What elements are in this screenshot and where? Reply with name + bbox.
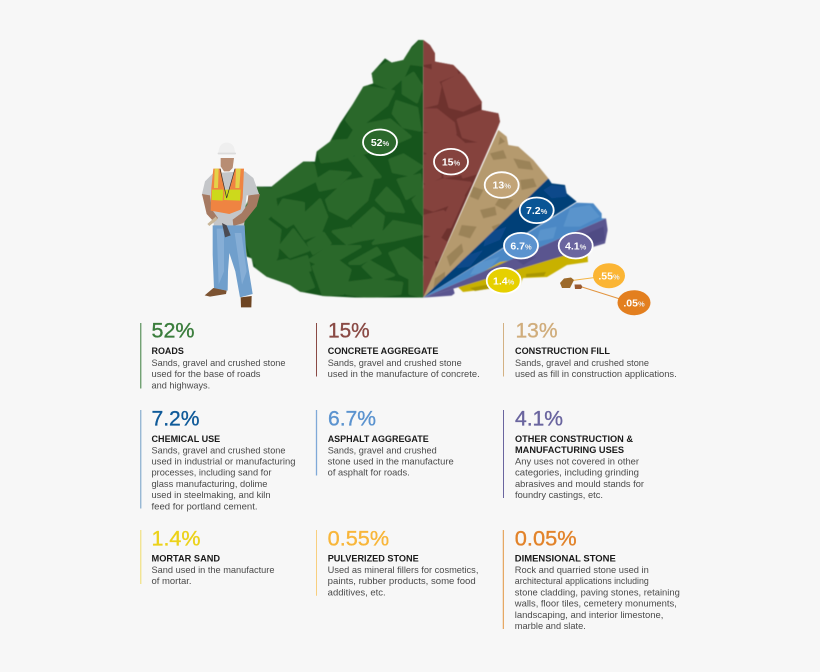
legend block: chemical use: Sands, gravel and crushed stone [152,445,286,455]
legend block: dimensional stone: landscaping, and interior limestone, [515,610,663,620]
legend block: dimensional stone: Rock and quarried stone used in [515,565,649,575]
legend block: chemical use: used in steelmaking, and kiln [152,490,270,500]
legend block: roads: Sands, gravel and crushed stone [152,358,286,368]
legend block: pulverized stone: 0.55% [328,526,389,550]
label: 1.4%: 1.4% [493,275,515,287]
legend block: pulverized stone: PULVERIZED STONE [328,554,419,565]
legend block: roads [141,319,286,390]
legend block: pulverized stone: paints, rubber products, some food [328,576,476,586]
icon: pulverized stone rock with leader and label [560,263,625,288]
legend block: construction fill: Sands, gravel and crushed stone [515,358,649,368]
legend block: dimensional stone: walls, floor tiles, cemetery monuments, [514,599,677,609]
pile wedges [240,37,610,303]
legend block: construction fill: 13% [516,319,558,343]
label: 4.1% [559,233,593,258]
label: 52%: 52% [371,137,390,149]
legend block: chemical use [141,407,296,511]
legend block: mortar sand: of mortar. [152,576,192,586]
label: 13%: 13% [493,180,511,192]
icon: pulverized stone rock with leader and label: .55% [598,270,620,282]
rock pile chart [240,37,650,315]
legend block: asphalt aggregate [316,407,454,478]
label: 1.4% [487,268,521,294]
legend block: asphalt aggregate: stone used in the manufacture [328,456,454,466]
legend block: dimensional stone: marble and slate. [515,621,586,631]
label: 4.1%: 4.1% [565,240,587,252]
label: 15%: 15% [442,156,461,168]
legend block: chemical use: CHEMICAL USE [152,434,220,445]
legend block: pulverized stone [316,526,478,597]
legend block: other construction and manufacturing uses: OTHER CONSTRUCTION & [515,434,633,445]
wedge: asphalt aggregate 6.7% [420,200,610,300]
legend block: concrete aggregate: Sands, gravel and crushed stone [328,358,462,368]
wedge: other construction uses 4.1% [420,215,610,300]
icon: construction worker [202,143,260,307]
legend block: chemical use: feed for portland cement. [152,501,258,511]
legend block: asphalt aggregate: Sands, gravel and crushed [328,445,437,455]
legend block: concrete aggregate: CONCRETE AGGREGATE [328,346,438,357]
icon: dimensional stone rock with leader and label: .05% [623,297,645,309]
legend block: asphalt aggregate: ASPHALT AGGREGATE [328,434,429,445]
label: 6.7% [504,233,538,258]
legend block: dimensional stone: architectural applications including [515,576,649,586]
legend block: pulverized stone: Used as mineral fillers for cosmetics, [328,565,478,575]
legend block: mortar sand: 1.4% [152,526,200,550]
legend block: chemical use: used in industrial or manufacturing [152,456,296,466]
label: 52% [363,130,397,155]
icon: dimensional stone rock with leader and label [574,284,650,315]
legend block: pulverized stone: additives, etc. [328,587,386,597]
legend block: chemical use: glass manufacturing, dolime [152,479,268,489]
legend block: dimensional stone [503,526,680,631]
legend block: mortar sand: MORTAR SAND [152,554,220,565]
legend block: chemical use: 7.2% [152,407,200,431]
legend block: construction fill [504,319,677,379]
legend block: other construction and manufacturing uses: 4.1% [515,407,563,431]
legend block: roads: 52% [152,319,194,343]
legend block: roads: and highways. [152,380,210,390]
wedge: mortar sand 1.4% [458,249,588,292]
wedge: construction fill 13% [424,130,549,298]
wedge: roads 52% [240,37,427,303]
legend block: concrete aggregate: used in the manufacture of concrete. [328,369,480,379]
legend block: chemical use: processes, including sand for [152,468,272,478]
legend block: other construction and manufacturing uses [504,407,644,500]
legend block: roads: ROADS [152,346,184,357]
legend block: other construction and manufacturing uses: foundry castings, etc. [515,490,603,500]
legend block: mortar sand [141,526,274,586]
legend block: asphalt aggregate: 6.7% [328,407,376,431]
label: 7.2% [520,198,554,223]
legend block: construction fill: CONSTRUCTION FILL [515,346,610,357]
wedge: chemical use 7.2% [420,177,580,300]
legend block: concrete aggregate: 15% [328,319,370,343]
legend block: mortar sand: Sand used in the manufacture [152,565,274,575]
legend block: other construction and manufacturing uses: abrasives and mould stands for [515,479,644,489]
legend block: other construction and manufacturing uses: MANUFACTURING USES [515,445,624,456]
label: 7.2%: 7.2% [526,205,548,217]
label: 6.7%: 6.7% [510,240,532,252]
legend block: dimensional stone: stone cladding, paving stones, retaining [515,587,680,597]
legend block: roads: used for the base of roads [152,369,261,379]
legend block: concrete aggregate [316,319,480,379]
legend block: other construction and manufacturing uses: categories, including grinding [515,468,639,478]
legend block: dimensional stone: DIMENSIONAL STONE [515,554,616,565]
legend block: construction fill: used as fill in construction applications. [515,369,677,379]
legend block: other construction and manufacturing uses: Any uses not covered in other [515,456,639,466]
legend block: dimensional stone: 0.05% [515,526,577,550]
label: 15% [434,149,468,174]
label: 13% [485,172,519,198]
wedge: concrete aggregate 15% [422,40,501,297]
legend block: asphalt aggregate: of asphalt for roads. [328,468,410,478]
